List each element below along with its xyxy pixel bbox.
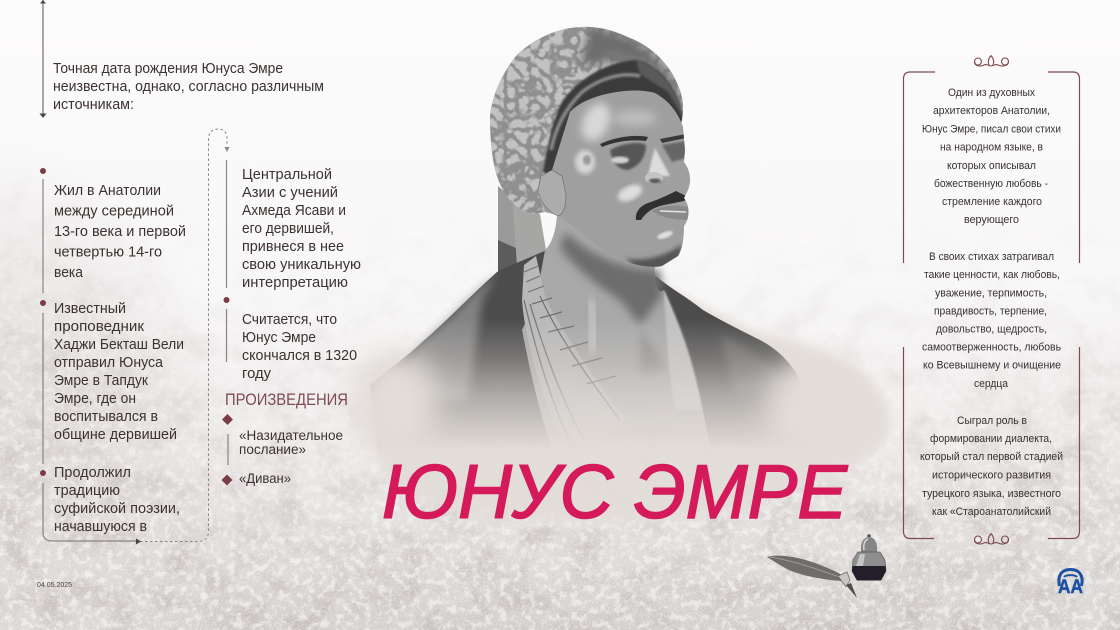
diamond bullet 1 (222, 414, 233, 425)
timeline dots (40, 168, 230, 476)
text: central Asia continuation (242, 167, 361, 291)
right panel text: paragraph 2: довольство, щедрость, (936, 324, 1047, 336)
text: Sufi tradition: традицию (54, 483, 120, 499)
text: Haji Bektash (54, 301, 184, 443)
text: central Asia continuation: Азии с учений (242, 185, 338, 201)
right panel text: paragraph 2: уважение, терпимость, (935, 288, 1047, 300)
text: Sufi tradition (54, 465, 180, 535)
ornament bottom (974, 534, 1009, 544)
right panel text: paragraph 2: сердца (974, 378, 1009, 390)
text: Haji Bektash: Эмре в Тапдук (54, 373, 149, 389)
ornament top (974, 56, 1009, 66)
portrait of Yunus Emre (370, 26, 799, 442)
left timeline connector (43, 0, 228, 542)
text: Haji Bektash: воспитывался в (54, 409, 158, 425)
list of works (222, 414, 343, 486)
text: Haji Bektash: Эмре, где он (54, 391, 136, 407)
text: lived in Anatolia: 13-го века и первой (54, 224, 186, 240)
right panel text: paragraph 2: самоотверженность, любовь (922, 342, 1061, 354)
ear (538, 170, 566, 216)
head (538, 90, 690, 272)
text: death year: Считается, что (242, 312, 337, 328)
text: Haji Bektash: общине дервишей (54, 427, 177, 443)
text: death year: скончался в 1320 (242, 348, 357, 364)
work 1: послание» (239, 442, 306, 457)
right panel text: paragraph 3 (920, 415, 1063, 518)
right panel text: paragraph 3: исторического развития (932, 470, 1051, 482)
intro text: неизвестна, однако, согласно различным (53, 79, 324, 95)
text: Haji Bektash: проповедник (54, 319, 145, 335)
headdress tail behind the neck (498, 186, 546, 272)
right panel text: paragraph 2: ко Всевышнему и очищение (923, 360, 1061, 372)
right panel text: paragraph 3: Сыграл роль в (957, 415, 1027, 427)
right panel text: paragraph 2 (922, 251, 1061, 390)
text: central Asia continuation: привнеся в нее (242, 239, 344, 255)
right panel text: paragraph 1: божественную любовь - (934, 178, 1048, 190)
heading: works: ПРОИЗВЕДЕНИЯ (225, 390, 348, 409)
right panel text: paragraph 3: как «Староанатолийский (932, 506, 1051, 518)
right panel text: paragraph 1: Юнус Эмре, писал свои стихи (922, 124, 1061, 136)
work 2: «Диван» (239, 471, 291, 486)
text: Sufi tradition: суфийской поэзии, (54, 501, 180, 517)
right panel text: paragraph 2: правдивость, терпение, (934, 306, 1047, 318)
text: death year: Юнус Эмре (242, 330, 316, 346)
background paper texture (0, 181, 1120, 630)
text: lived in Anatolia: века (54, 265, 84, 281)
text: death year: году (242, 366, 272, 382)
text: Haji Bektash: Известный (54, 301, 126, 317)
intro text: источникам: (53, 97, 134, 113)
text: central Asia continuation: Ахмеда Ясави и (242, 203, 346, 219)
text: lived in Anatolia: Жил в Анатолии (54, 183, 161, 199)
right panel text: paragraph 2: такие ценности, как любовь, (924, 269, 1060, 281)
wash fading the cloak edges (353, 350, 865, 465)
watercolor wash behind portrait (373, 282, 890, 522)
icon: Anadolu Agency logo (1058, 570, 1083, 598)
right panel text: paragraph 1: верующего (964, 214, 1019, 226)
right panel text: paragraph 1: стремление каждого (942, 196, 1042, 208)
intro text (53, 61, 324, 113)
right panel frame (904, 72, 1080, 538)
neck and chest (522, 216, 708, 436)
text: Haji Bektash: Хаджи Бекташ Вели (54, 337, 184, 353)
text: lived in Anatolia (54, 183, 186, 281)
text: lived in Anatolia: между серединой (54, 204, 174, 220)
right panel text: paragraph 1: архитекторов Анатолии, (933, 105, 1050, 117)
right panel text: paragraph 1: Один из духовных (948, 87, 1035, 99)
text: lived in Anatolia: четвертью 14-го (54, 244, 162, 260)
date: 04.05.2025 (37, 580, 72, 589)
right panel text: paragraph 1: которых описывал (947, 160, 1036, 172)
work 1: «Назидательное (239, 428, 343, 443)
text: Sufi tradition: начавшуюся в (54, 519, 147, 535)
right panel text: paragraph 3: турецкого языка, известного (922, 488, 1061, 500)
diamond bullet 2 (222, 474, 232, 486)
right panel text: paragraph 1: на народном языке, в (940, 142, 1043, 154)
icon: feather quill (767, 556, 857, 598)
text: Haji Bektash: отправил Юнуса (54, 355, 164, 371)
text: central Asia continuation: интерпретацию (242, 275, 348, 291)
text: central Asia continuation: его дервишей, (242, 221, 334, 237)
icon: Anadolu Agency logo: AA (1058, 577, 1083, 598)
right panel text: paragraph 3: формировании диалекта, (930, 433, 1052, 445)
text: death year (242, 312, 357, 382)
intro text: Точная дата рождения Юнуса Эмре (53, 61, 283, 77)
turban (490, 27, 690, 214)
collar band (522, 256, 620, 426)
text: Sufi tradition: Продолжил (54, 465, 131, 481)
arrowheads (40, 0, 230, 544)
right panel text: paragraph 3: который стал первой стадией (920, 451, 1063, 463)
icon: inkwell (852, 534, 886, 580)
right panel text: paragraph 2: В своих стихах затрагивал (929, 251, 1054, 263)
title: ЮНУС ЭМРЕ (382, 450, 848, 535)
cloak (370, 250, 799, 442)
work 1 (239, 428, 343, 457)
text: central Asia continuation: свою уникальную (242, 257, 361, 273)
right panel text: paragraph 1 (922, 87, 1061, 226)
text: central Asia continuation: Центральной (242, 167, 332, 183)
